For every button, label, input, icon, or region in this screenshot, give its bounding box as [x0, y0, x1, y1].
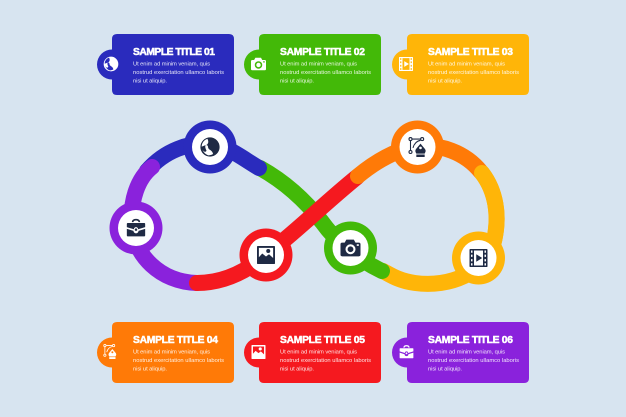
- text block 05: [280, 350, 371, 372]
- title 06: SAMPLE TITLE 06: [428, 335, 513, 346]
- text block 02: Ut enim ad minim veniam, quis: [280, 62, 357, 68]
- text block 05: nostrud exercitation ullamco laboris: [280, 358, 371, 364]
- text block 06: nisi ut aliquip.: [428, 366, 462, 372]
- text block 06: Ut enim ad minim veniam, quis: [428, 350, 505, 356]
- text block 01: Ut enim ad minim veniam, quis: [133, 62, 210, 68]
- card 01: blue: [97, 34, 234, 95]
- text block 05: Ut enim ad minim veniam, quis: [280, 350, 357, 356]
- icon: camera: [340, 240, 360, 256]
- text block 06: [428, 350, 519, 372]
- text block 01: [133, 62, 224, 84]
- infinity loop: [132, 144, 497, 284]
- text block 03: [428, 62, 519, 84]
- node: film: [452, 232, 505, 284]
- text block 05: nisi ut aliquip.: [280, 366, 314, 372]
- text block 03: Ut enim ad minim veniam, quis: [428, 62, 505, 68]
- node: image: [240, 228, 292, 282]
- text block 03: nisi ut aliquip.: [428, 78, 462, 84]
- text block 04: nostrud exercitation ullamco laboris: [133, 358, 224, 364]
- icon: globe: [200, 137, 220, 157]
- card 02: green: [244, 34, 381, 95]
- icon: pen tool: [104, 344, 116, 359]
- segment: yellow top: [482, 173, 497, 245]
- text block 01: nisi ut aliquip.: [133, 78, 167, 84]
- segment: blue: [147, 144, 259, 171]
- node: camera: [324, 222, 377, 274]
- text block 02: nostrud exercitation ullamco laboris: [280, 70, 371, 76]
- text block 04: Ut enim ad minim veniam, quis: [133, 350, 210, 356]
- segment: orange: [358, 146, 481, 176]
- icon: globe: [104, 57, 118, 71]
- icon: film: [399, 57, 413, 71]
- card 03: yellow: [392, 34, 529, 95]
- node: briefcase: [110, 202, 162, 254]
- card 05: red: [244, 322, 381, 383]
- segment: green: [260, 168, 382, 271]
- title 02: SAMPLE TITLE 02: [280, 47, 365, 58]
- text block 01: nostrud exercitation ullamco laboris: [133, 70, 224, 76]
- segment: red: [197, 177, 357, 283]
- text block 02: [280, 62, 371, 84]
- text block 06: nostrud exercitation ullamco laboris: [428, 358, 519, 364]
- icon: image: [257, 246, 275, 264]
- node: pen tool: [391, 120, 444, 174]
- icon: film: [470, 249, 488, 267]
- node: globe: [184, 120, 236, 174]
- title 01: SAMPLE TITLE 01: [133, 47, 215, 58]
- icon: pen tool: [409, 138, 426, 157]
- segment: purple: [132, 167, 197, 283]
- text block 03: nostrud exercitation ullamco laboris: [428, 70, 519, 76]
- icon: briefcase: [400, 345, 413, 358]
- icon: image: [252, 345, 266, 359]
- title 03: SAMPLE TITLE 03: [428, 47, 513, 58]
- title 05: SAMPLE TITLE 05: [280, 335, 365, 346]
- segment: yellow: [383, 173, 497, 284]
- title 04: SAMPLE TITLE 04: [133, 335, 218, 346]
- icon: camera: [251, 58, 266, 70]
- card 04: orange: [97, 322, 234, 383]
- icon: briefcase: [127, 219, 145, 236]
- text block 02: nisi ut aliquip.: [280, 78, 314, 84]
- text block 04: nisi ut aliquip.: [133, 366, 167, 372]
- text block 04: [133, 350, 224, 372]
- card 06: purple: [392, 322, 529, 383]
